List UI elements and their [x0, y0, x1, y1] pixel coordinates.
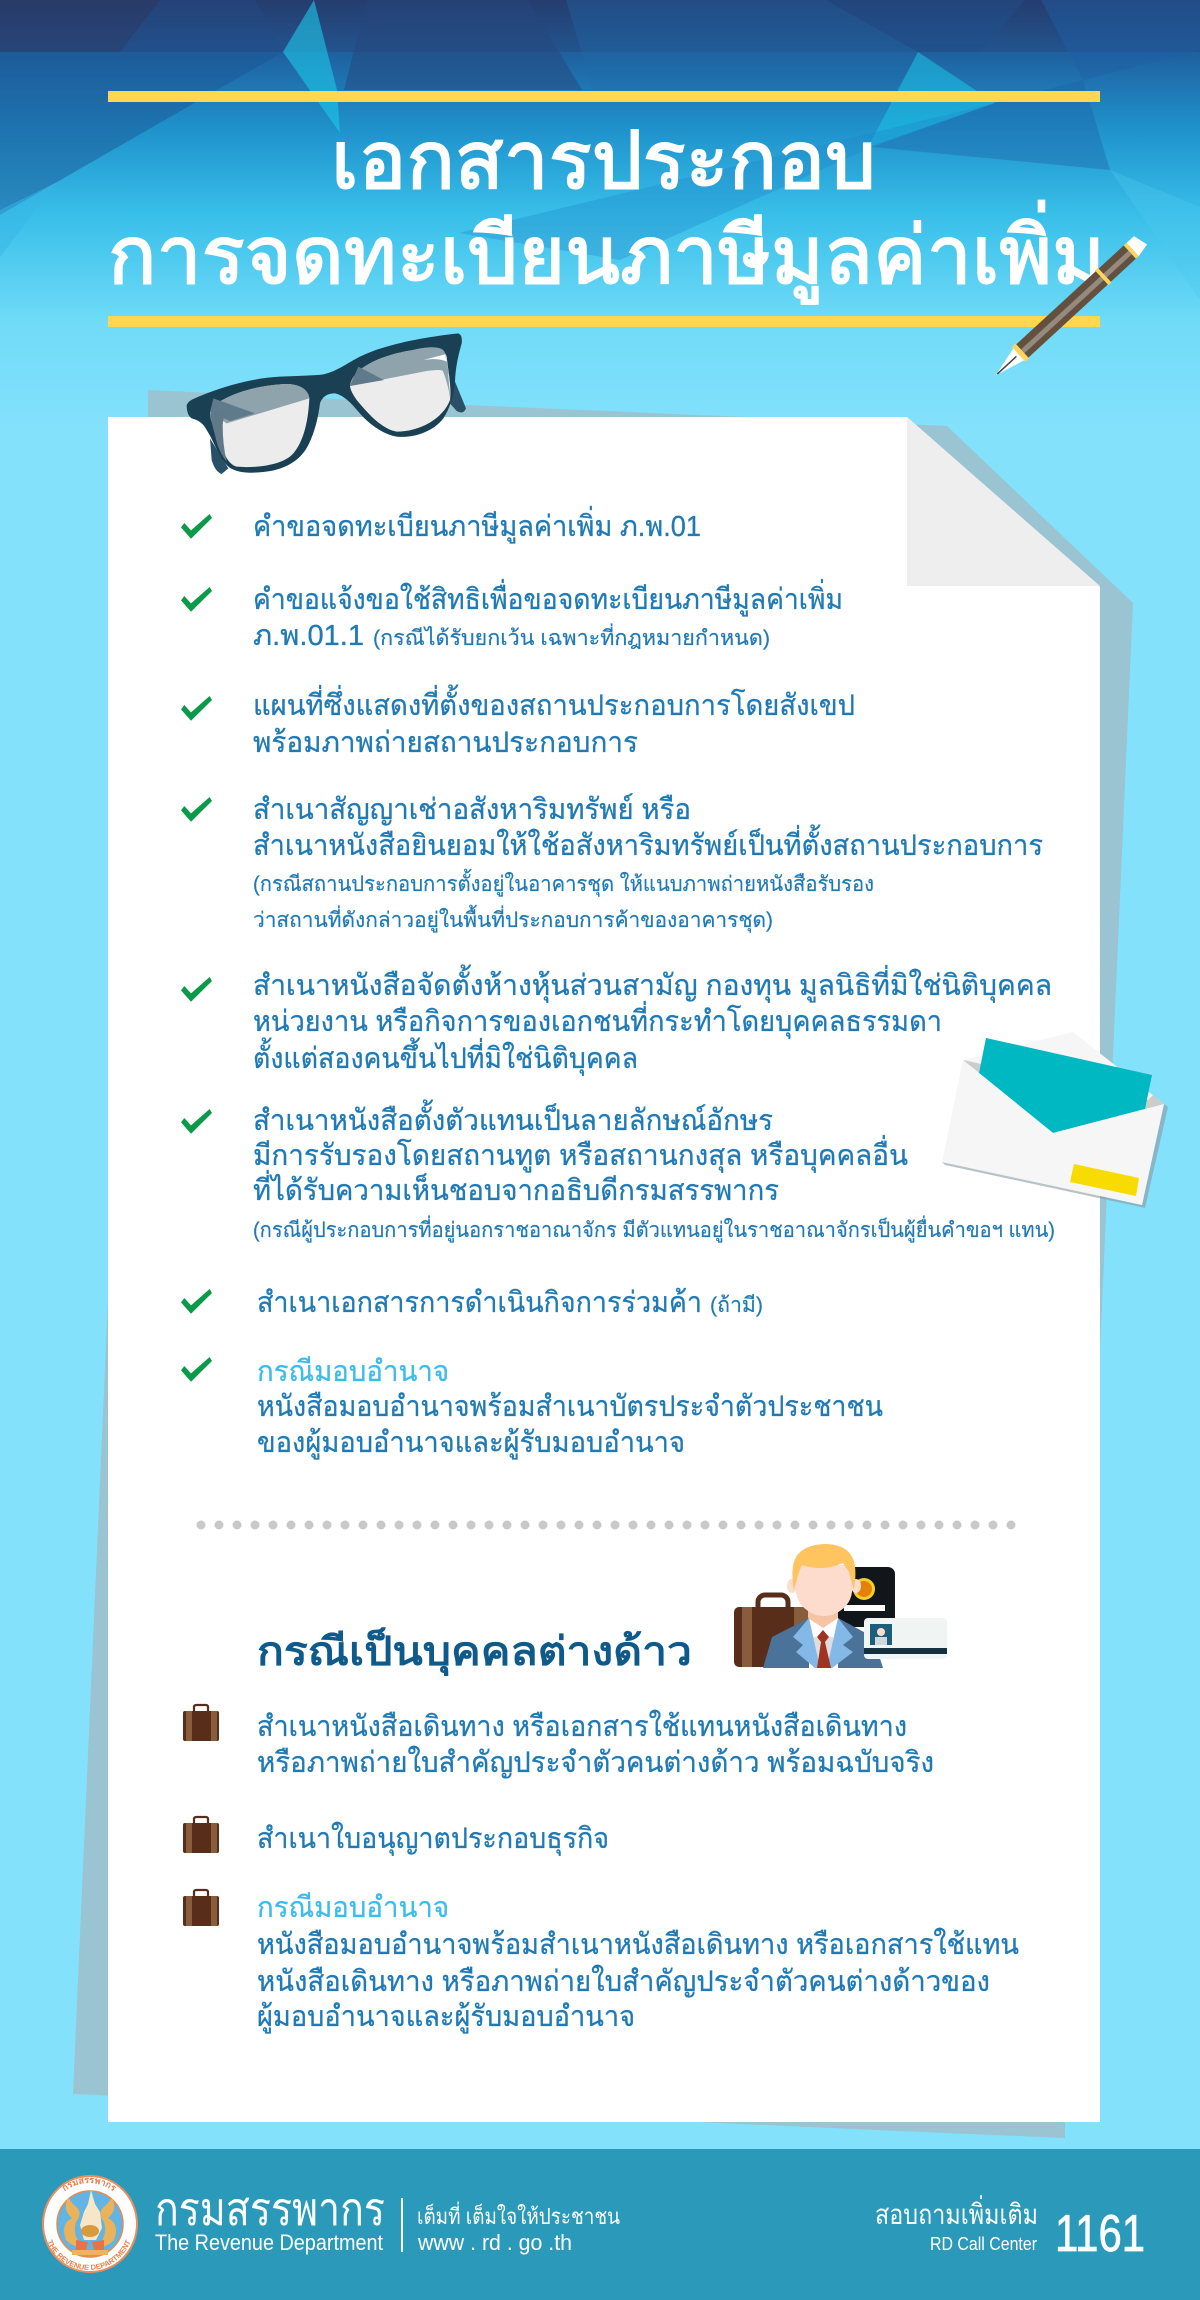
department name: www . rd . go .th — [417, 2230, 572, 2255]
logo: revenue department seal: กรมสรรพากร — [62, 2178, 116, 2192]
item 2: คำขอแจ้งขอใช้สิทธิเพื่อขอจดทะเบียนภาษีมูลค่าเพิ่ม — [253, 579, 843, 617]
item 4: ว่าสถานที่ดังกล่าวอยู่ในพื้นที่ประกอบการค้าของอาคารชุด) — [253, 905, 773, 933]
call center: 1161 — [1055, 2205, 1145, 2263]
item 6: ที่ได้รับความเห็นชอบจากอธิบดีกรมสรรพากร — [253, 1170, 779, 1207]
folded corner — [907, 417, 1100, 586]
title — [108, 116, 1105, 304]
item 1 — [181, 506, 701, 544]
item 2 — [181, 579, 843, 652]
heading: foreigners: กรณีเป็นบุคคลต่างด้าว — [257, 1626, 692, 1677]
item 7: (ถ้ามี) — [710, 1294, 763, 1317]
icon: fountain pen — [989, 233, 1150, 383]
dotted divider — [201, 1520, 1014, 1530]
call center: สอบถามเพิ่มเติม — [875, 2195, 1038, 2230]
item 3: พร้อมภาพถ่ายสถานประกอบการ — [253, 727, 638, 759]
item 2: ภ.พ.01.1 — [253, 620, 364, 652]
item 6: มีการรับรองโดยสถานทูต หรือสถานกงสุล หรือบุคคลอื่น — [253, 1135, 908, 1173]
item 4: (กรณีสถานประกอบการตั้งอยู่ในอาคารชุด ให้แนบภาพถ่ายหนังสือรับรอง — [253, 869, 874, 897]
bottom yellow rule — [108, 316, 1100, 327]
icon: envelope — [942, 1032, 1168, 1208]
item 7: สำเนาเอกสารการดำเนินกิจการร่วมค้า — [257, 1287, 702, 1319]
department name — [155, 2183, 620, 2255]
item 2: (กรณีได้รับยกเว้น เฉพาะที่กฎหมายกำหนด) — [373, 623, 770, 650]
item 8: กรณีมอบอำนาจ — [257, 1356, 449, 1388]
item 5: หน่วยงาน หรือกิจการของเอกชนที่กระทำโดยบุคคลธรรมดา — [253, 1001, 942, 1039]
item 3 — [181, 684, 855, 759]
item 6: สำเนาหนังสือตั้งตัวแทนเป็นลายลักษณ์อักษร — [253, 1099, 773, 1137]
icon: glasses — [187, 333, 466, 474]
panel: paper sheet — [108, 417, 1100, 2122]
item 3: แผนที่ซึ่งแสดงที่ตั้งของสถานประกอบการโดยสังเขป — [253, 684, 855, 722]
item 8: หนังสือมอบอำนาจพร้อมสำเนาบัตรประจำตัวประชาชน — [257, 1391, 883, 1423]
item 6: (กรณีผู้ประกอบการที่อยู่นอกราชอาณาจักร มีตัวแทนอยู่ในราชอาณาจักรเป็นผู้ยื่นคำขอฯ แทน) — [253, 1215, 1055, 1243]
item 8 — [181, 1356, 883, 1460]
item 6 — [181, 1099, 1055, 1243]
department name: เต็มที่ เต็มใจให้ประชาชน — [417, 2201, 620, 2229]
foreign item 3: ผู้มอบอำนาจและผู้รับมอบอำนาจ — [257, 2001, 635, 2034]
foreign item 3: หนังสือมอบอำนาจพร้อมสำเนาหนังสือเดินทาง หรือเอกสารใช้แทน — [257, 1927, 1019, 1961]
foreign item 2 — [183, 1817, 609, 1856]
logo: revenue department seal — [42, 2175, 138, 2273]
foreign item 2: สำเนาใบอนุญาตประกอบธุรกิจ — [257, 1821, 609, 1856]
title: เอกสารประกอบ — [331, 116, 876, 205]
item 5: ตั้งแต่สองคนขึ้นไปที่มิใช่นิติบุคคล — [253, 1037, 638, 1076]
item 5: สำเนาหนังสือจัดตั้งห้างหุ้นส่วนสามัญ กองทุน มูลนิธิที่มิใช่นิติบุคคล — [253, 964, 1052, 1003]
foreign item 3: กรณีมอบอำนาจ — [257, 1892, 449, 1924]
icon: businessman with passport — [734, 1544, 947, 1668]
item 4: สำเนาหนังสือยินยอมให้ใช้อสังหาริมทรัพย์เป็นที่ตั้งสถานประกอบการ — [253, 824, 1043, 862]
logo: revenue department seal: THE REVENUE DEPARTMENT — [48, 2239, 130, 2270]
item 4: สำเนาสัญญาเช่าอสังหาริมทรัพย์ หรือ — [253, 793, 691, 826]
foreign item 3: หนังสือเดินทาง หรือภาพถ่ายใบสำคัญประจำตัวคนต่างด้าวของ — [257, 1964, 990, 1998]
call center — [875, 2195, 1145, 2263]
item 8: ของผู้มอบอำนาจและผู้รับมอบอำนาจ — [257, 1427, 685, 1460]
paper shadow — [73, 390, 1133, 2138]
department name: กรมสรรพากร — [155, 2183, 385, 2235]
call center: RD Call Center — [930, 2234, 1037, 2254]
title: การจดทะเบียนภาษีมูลค่าเพิ่ม — [108, 201, 1105, 304]
item 4 — [181, 793, 1043, 933]
foreign item 1: สำเนาหนังสือเดินทาง หรือเอกสารใช้แทนหนังสือเดินทาง — [257, 1709, 907, 1743]
list: required documents — [181, 506, 1055, 1460]
list: foreigner documents — [183, 1705, 1019, 2034]
item 1: คำขอจดทะเบียนภาษีมูลค่าเพิ่ม ภ.พ.01 — [253, 506, 701, 544]
item 5 — [181, 964, 1052, 1076]
foreign item 1: หรือภาพถ่ายใบสำคัญประจำตัวคนต่างด้าว พร้อมฉบับจริง — [257, 1745, 934, 1779]
footer bar — [0, 2149, 1200, 2300]
foreign item 1 — [183, 1705, 934, 1779]
foreign item 3 — [183, 1890, 1019, 2034]
top yellow rule — [108, 91, 1100, 102]
department name: The Revenue Department — [155, 2230, 383, 2255]
